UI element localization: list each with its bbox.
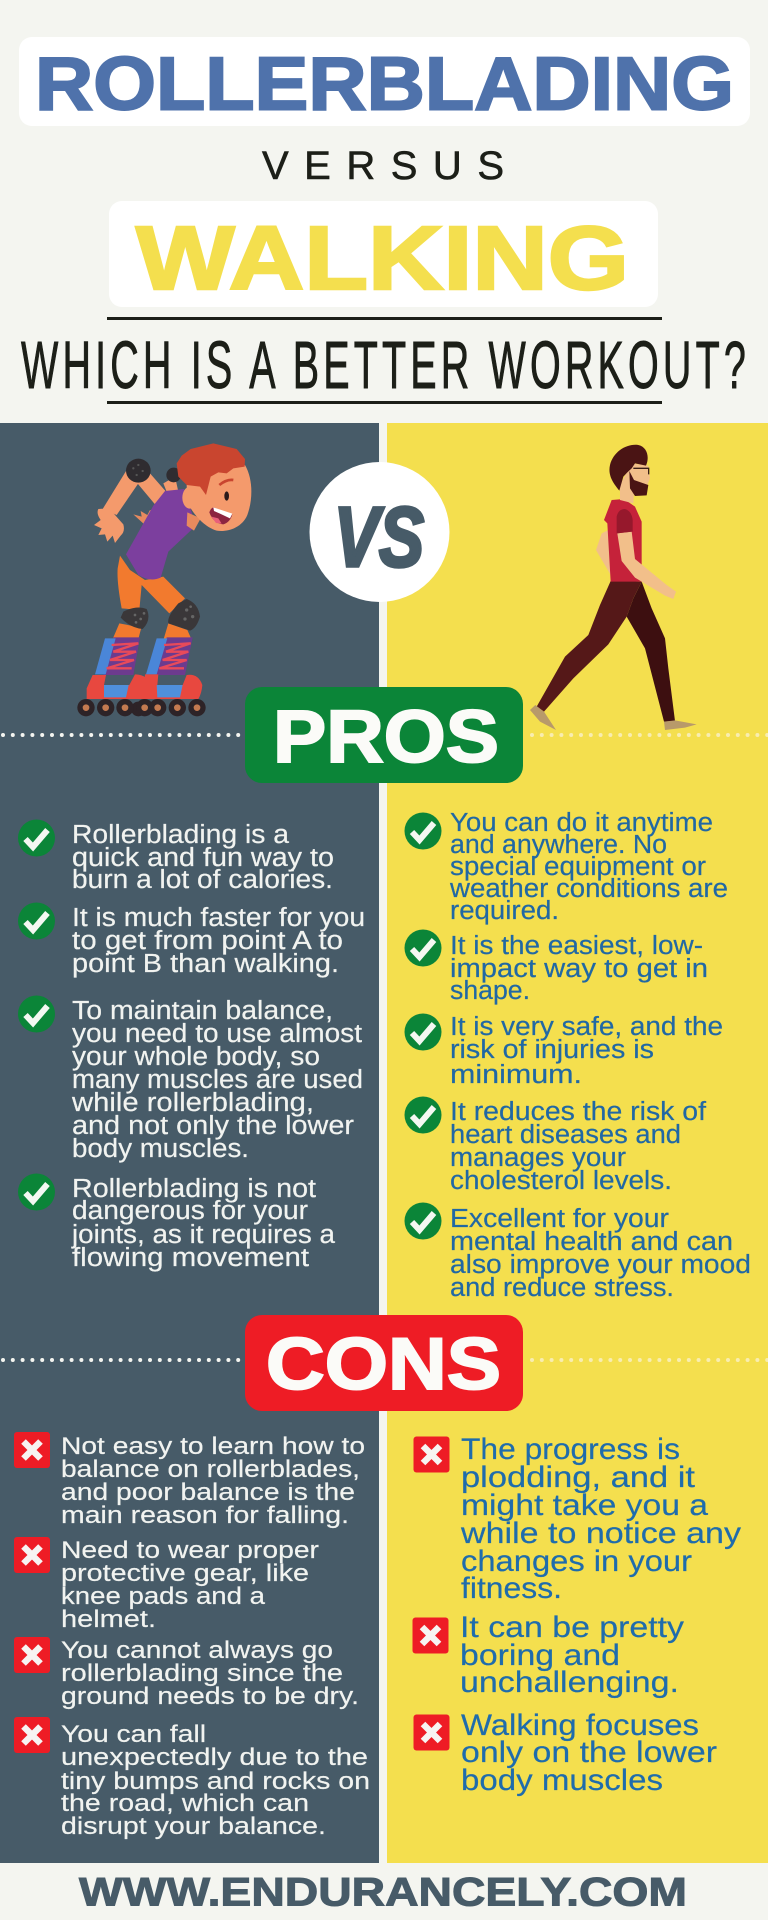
con item 1 <box>414 1433 741 1605</box>
pro item 3: body muscles. <box>72 1135 249 1163</box>
con item 1: and poor balance is the <box>61 1479 355 1506</box>
pro item 3 <box>18 996 363 1163</box>
pro item 3: while rollerblading, <box>71 1089 314 1117</box>
con item 2: protective gear, like <box>61 1560 309 1587</box>
con item 1: might take you a <box>461 1489 709 1522</box>
icon: rollerblader illustration <box>77 443 251 716</box>
pro item 1: and anywhere. No <box>450 831 667 859</box>
pro item 4: heart diseases and <box>450 1121 681 1149</box>
pro item 2: It is much faster for you <box>72 904 365 932</box>
pro item 1: special equipment or <box>450 853 707 881</box>
pro item 2 <box>404 930 708 1005</box>
con item 1: plodding, and it <box>461 1461 695 1494</box>
con item 2: boring and <box>460 1639 620 1672</box>
con item 2: It can be pretty <box>460 1611 684 1644</box>
pro item 5: and reduce stress. <box>450 1274 674 1302</box>
con item 4: disrupt your balance. <box>61 1813 326 1840</box>
panel: rollerblading cons <box>14 1432 370 1840</box>
pro item 4: joints, as it requires a <box>71 1221 336 1249</box>
con item 3: rollerblading since the <box>61 1660 343 1687</box>
con item 4: the road, which can <box>61 1790 309 1817</box>
pro item 5 <box>404 1202 751 1302</box>
con item 1: changes in your <box>461 1545 692 1578</box>
con item 4 <box>14 1717 370 1840</box>
con item 3: You cannot always go <box>61 1637 333 1664</box>
divider: cons dotted line <box>3 1358 768 1362</box>
con item 1 <box>14 1432 365 1529</box>
pro item 1: weather conditions are <box>449 875 728 903</box>
footer: website url: WWW.ENDURANCELY.COM <box>79 1870 687 1914</box>
pro item 1 <box>18 820 334 894</box>
pro item 2: shape. <box>450 977 530 1005</box>
heading: cons badge <box>245 1315 523 1411</box>
heading: pros badge: PROS <box>273 695 499 778</box>
pro item 3: minimum. <box>450 1061 582 1089</box>
con item 1: main reason for falling. <box>61 1502 349 1529</box>
pro item 4: flowing movement <box>72 1244 309 1272</box>
panel: walking pros <box>404 809 751 1302</box>
panel: rollerblading background <box>0 423 379 1863</box>
con item 2: Need to wear proper <box>61 1537 319 1564</box>
pro item 1: Rollerblading is a <box>72 821 290 849</box>
pro item 3: It is very safe, and the <box>450 1013 723 1041</box>
pro item 2: point B than walking. <box>72 950 339 978</box>
icon: walking man illustration <box>530 445 697 730</box>
con item 3: body muscles <box>461 1764 663 1797</box>
panel: walking background <box>387 423 768 1863</box>
con item 1: fitness. <box>461 1572 562 1605</box>
con item 3: only on the lower <box>461 1736 717 1769</box>
con item 2 <box>412 1611 684 1699</box>
pro item 3: your whole body, so <box>72 1043 320 1071</box>
con item 1: while to notice any <box>460 1517 741 1550</box>
title: Walking: WALKING <box>136 209 629 309</box>
con item 4: tiny bumps and rocks on <box>61 1768 370 1795</box>
panel: walking cons <box>412 1433 741 1797</box>
heading: pros badge <box>245 687 523 783</box>
pro item 4 <box>18 1174 336 1272</box>
pro item 2: impact way to get in <box>450 955 708 983</box>
pro item 5: Excellent for your <box>450 1205 670 1233</box>
pro item 4: cholesterol levels. <box>450 1167 672 1195</box>
pro item 1: You can do it anytime <box>450 809 713 837</box>
heading: cons badge: CONS <box>266 1324 501 1405</box>
heading: versus: VERSUS <box>262 144 504 188</box>
pro item 2: to get from point A to <box>72 927 343 955</box>
con item 3: ground needs to be dry. <box>61 1683 359 1710</box>
pro item 4: Rollerblading is not <box>72 1175 316 1203</box>
con item 1: balance on rollerblades, <box>61 1456 360 1483</box>
con item 2 <box>14 1537 319 1633</box>
pro item 4 <box>404 1096 707 1195</box>
pro item 4: manages your <box>450 1144 627 1172</box>
title: Rollerblading: ROLLERBLADING <box>35 42 734 126</box>
icon: VS circle: VS <box>334 490 424 584</box>
pro item 1: burn a lot of calories. <box>72 866 333 894</box>
con item 1: Not easy to learn how to <box>61 1433 365 1460</box>
pro item 3: many muscles are used <box>72 1066 363 1094</box>
pro item 1 <box>404 809 728 925</box>
icon: VS circle <box>310 462 450 602</box>
divider: pros dotted line <box>3 733 768 737</box>
con item 3: Walking focuses <box>461 1709 699 1742</box>
pro item 3: and not only the lower <box>72 1112 355 1140</box>
pro item 5: mental health and can <box>450 1228 733 1256</box>
pro item 1: required. <box>450 897 559 925</box>
pro item 3: To maintain balance, <box>72 997 333 1025</box>
pro item 5: also improve your mood <box>450 1251 751 1279</box>
con item 1: The progress is <box>461 1433 680 1466</box>
pro item 2: It is the easiest, low- <box>450 932 703 960</box>
con item 4: You can fall <box>61 1721 206 1748</box>
pro item 2 <box>18 902 365 978</box>
con item 3 <box>14 1637 359 1710</box>
pro item 1: quick and fun way to <box>72 844 334 872</box>
pro item 3 <box>404 1013 723 1089</box>
pro item 3: risk of injuries is <box>450 1036 654 1064</box>
pro item 4: It reduces the risk of <box>450 1098 707 1126</box>
con item 4: unexpectedly due to the <box>61 1744 368 1771</box>
con item 2: unchallenging. <box>460 1666 679 1699</box>
pro item 3: you need to use almost <box>72 1020 362 1048</box>
panel: rollerblading pros <box>18 820 365 1272</box>
con item 2: knee pads and a <box>61 1583 265 1610</box>
con item 3 <box>414 1709 717 1797</box>
con item 2: helmet. <box>61 1606 156 1633</box>
pro item 4: dangerous for your <box>72 1197 309 1225</box>
